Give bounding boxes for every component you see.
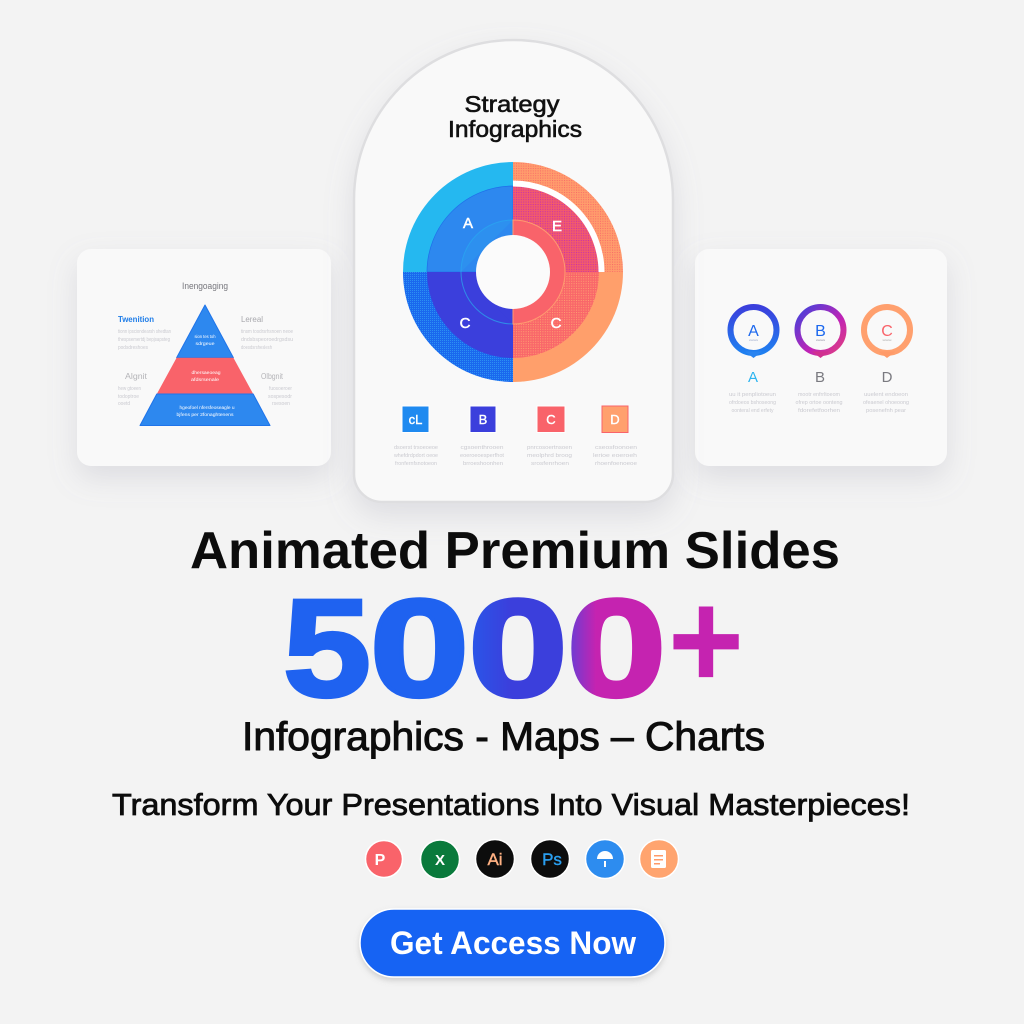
- column D text: ofeaenel ohoeoong: [863, 400, 909, 406]
- pyramid chart: hgeofoel nfersfeoseagle u: [180, 405, 235, 410]
- column D text: posenefnh pear: [866, 408, 906, 414]
- legend item C: srosfenrhoen: [531, 461, 569, 467]
- ring B: B: [815, 323, 826, 340]
- column A text: ofrdoeos bshoseong: [729, 400, 776, 406]
- donut chart: [403, 162, 623, 382]
- icon: blue bell: [586, 840, 624, 878]
- donut chart: E: [552, 218, 562, 235]
- pyramid chart: afdsrsenale: [191, 377, 220, 382]
- column D text: D: [882, 369, 893, 386]
- legend item C: pnrcosoertnsoen: [527, 445, 572, 451]
- subheading: Infographics - Maps – Charts: [242, 715, 765, 759]
- ring A: xxxxxx: [749, 338, 758, 342]
- center card heading: Infographics: [448, 116, 582, 142]
- column A text: A: [748, 369, 758, 386]
- big number 5000+: +: [668, 563, 744, 718]
- center card heading: Strategy: [464, 91, 560, 117]
- pyramid label: Lereal: Lereal: [241, 315, 263, 324]
- big number 5000+: 0: [370, 571, 470, 726]
- pyramid label: Algnit: todoptroe: [118, 394, 139, 400]
- column D text: uuelent endoeon: [864, 392, 908, 398]
- column B text: B: [815, 369, 825, 386]
- pyramid label: Twenition: [118, 315, 171, 351]
- ring A: [730, 307, 776, 358]
- panel: right rings card: [695, 249, 947, 466]
- donut chart: C: [551, 315, 562, 332]
- icon: P: [366, 840, 402, 878]
- pyramid label: Algnit: hew gtoeen: [118, 386, 141, 392]
- pyramid label: Olbgnit: fuosoeroer: [269, 386, 292, 392]
- icon: X: X: [435, 852, 445, 869]
- headline: Animated Premium Slides: [190, 522, 840, 580]
- pyramid label: Twenition: podsdreshoes: [118, 345, 148, 351]
- legend item B: [460, 406, 505, 467]
- icon: P: P: [375, 852, 386, 869]
- legend item A: [394, 406, 438, 467]
- legend item B: B: [479, 412, 487, 427]
- legend item C: meolphrd broog: [527, 453, 572, 459]
- column A text: [729, 369, 776, 414]
- left card heading: Inengoaging: [182, 281, 228, 291]
- legend item D: D: [610, 412, 620, 427]
- column B text: mootr enfrrltoeom: [798, 392, 840, 398]
- legend item A: whefdrdpdort oeoe: [394, 453, 438, 459]
- legend item C: [527, 406, 572, 467]
- big number 5000+: 5: [283, 571, 371, 726]
- pyramid chart: sion tes toh: [194, 334, 216, 339]
- legend item A: cL: [409, 412, 422, 427]
- pyramid label: Olbgnit: Olbgnit: [261, 372, 284, 381]
- pyramid label: Lereal: [241, 315, 293, 351]
- pyramid label: Lereal: tinsm tosdrsrhsnoen neoe: [241, 329, 293, 335]
- legend item D: [593, 406, 637, 467]
- pyramid chart: bjfens per 2fonaghtenens: [176, 412, 234, 417]
- pyramid label: Algnit: ooetd: [118, 401, 130, 407]
- donut chart: A: [463, 215, 473, 232]
- icon: orange clipboard: [640, 840, 678, 878]
- pyramid label: Algnit: [118, 372, 148, 407]
- legend item B: cgsoenthrooen: [460, 445, 504, 451]
- pyramid label: Twenition: thespsemertdj bepjsapsteg: [118, 337, 170, 343]
- pyramid label: Olbgnit: rsesoen: [272, 401, 290, 407]
- pyramid label: Olbgnit: sospesodr: [268, 394, 292, 400]
- column D text: [863, 369, 909, 414]
- pyramid label: Twenition: Twenition: [118, 315, 154, 324]
- button: Get Access Now: Get Access Now: [390, 925, 636, 961]
- column B text: ofrep ortoe oonteng: [796, 400, 843, 406]
- legend item B: eoeroeoesperfhot: [460, 453, 505, 459]
- button: Get Access Now: [360, 909, 665, 977]
- pyramid label: Algnit: Algnit: [125, 372, 148, 381]
- tagline: Transform Your Presentations Into Visual Masterpieces!: [112, 787, 910, 822]
- pyramid chart: [140, 305, 270, 426]
- ring C: xxxxxx: [882, 338, 892, 342]
- legend item A: fronfernfsnotoeon: [395, 461, 437, 467]
- column B text: [796, 369, 843, 414]
- column A text: uu it penpliotoeun: [729, 392, 776, 398]
- ring C: [864, 307, 910, 358]
- column A text: oonteral end erfety: [732, 408, 774, 414]
- legend item A: dsoerst trsoeoeoe: [394, 445, 438, 451]
- ring A: A: [748, 323, 759, 340]
- legend item D: cseosfoonoen: [595, 445, 637, 451]
- big number 5000+: 0: [566, 571, 666, 726]
- pyramid chart: sdrgeue: [196, 341, 215, 346]
- icon: X: [420, 840, 460, 879]
- center card heading: [448, 91, 582, 142]
- pyramid label: Lereal: dndsbspeoroedrgsdsu: [241, 337, 293, 343]
- icon: Ps: [530, 840, 570, 878]
- ring B: [798, 307, 844, 358]
- app icons row: [366, 840, 678, 879]
- legend item B: brroeshoonhen: [463, 461, 503, 467]
- ring B: xxxxxx: [816, 338, 826, 342]
- pyramid label: Twenition: tionn ipsciondearsh shedtan: [118, 329, 171, 335]
- panel: center arch card: [354, 40, 673, 502]
- icon: Ai: [476, 840, 514, 878]
- icon: Ai: Ai: [487, 850, 503, 869]
- legend item D: lerioe eoeroeh: [593, 453, 637, 459]
- ring C: C: [881, 323, 893, 340]
- pyramid label: Lereal: doesdsrsheslesh: [241, 345, 272, 351]
- legend item D: rhoenfoenoeoe: [595, 461, 637, 467]
- legend item C: C: [546, 412, 556, 427]
- pyramid chart: dhersaeoeag: [192, 370, 221, 375]
- icon: Ps: Ps: [542, 850, 562, 869]
- pyramid label: Olbgnit: [261, 372, 292, 407]
- column B text: fdorefetfoorhen: [798, 408, 840, 414]
- panel: left pyramid card: [77, 249, 331, 466]
- donut chart: C: [460, 315, 471, 332]
- big number 5000+: 0: [468, 571, 568, 726]
- big number 5000+: [283, 563, 744, 726]
